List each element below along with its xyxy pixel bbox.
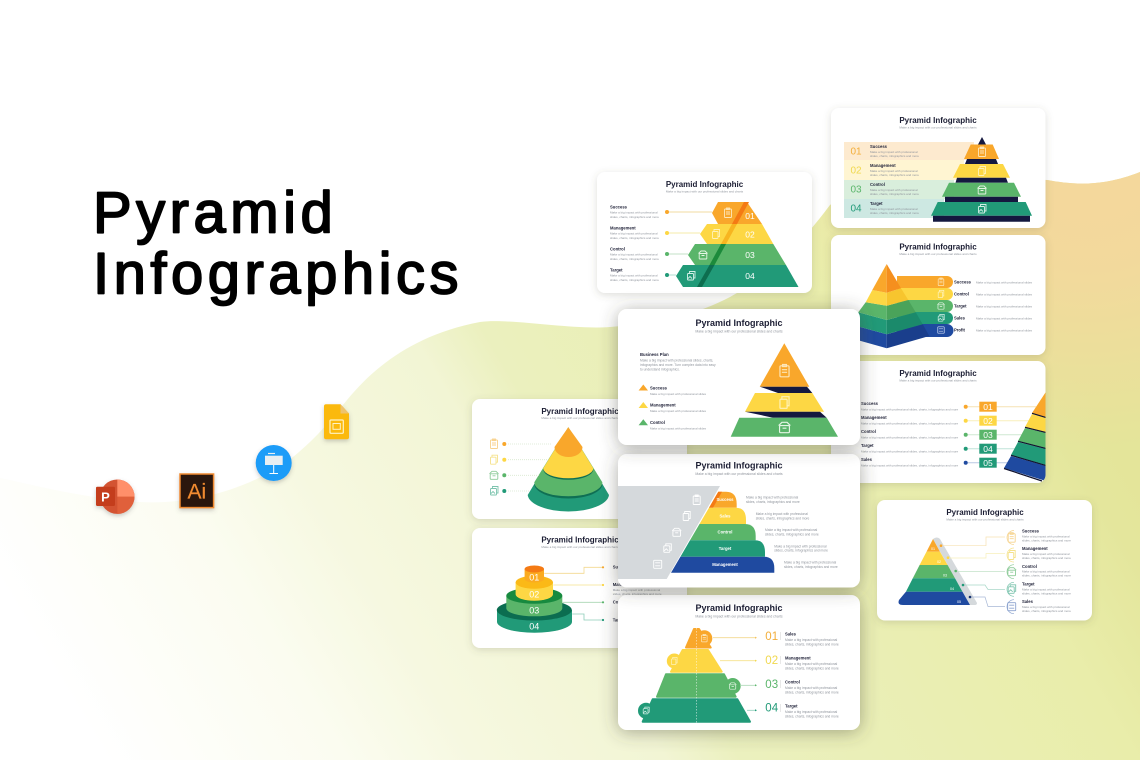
intro text [640,352,716,372]
colour bands: Make a big impact with professional [870,169,918,173]
labels: slides, charts, infographics and more [1022,574,1071,578]
panel: hexagon tab pyramid: Make a big impact with our professional slides and charts [666,190,744,194]
labels: Make a big impact with professional [785,662,837,666]
step chart: Management [712,562,738,567]
dots and connectors [490,439,552,495]
arrows [713,637,757,711]
stacked cylinder chart: 04 [529,622,539,632]
connectors and number boxes: 03 [983,430,993,440]
labels: Target [861,443,874,448]
connectors and number boxes: 05 [983,458,993,468]
numbers: 02 [765,655,778,667]
panel: stepped pyramid: Make a big impact with our professional slides and charts [695,472,783,476]
labels: slides, charts, infographics and more [610,257,659,261]
colour bands: 02 [850,166,862,176]
pyramid chart: 05 [957,600,961,604]
pyramid chart [731,343,838,437]
labels: Management [610,226,636,230]
pyramid chart: 01 [745,211,755,221]
descriptions: Make a big impact with professional [756,512,808,516]
panel: stacked cylinders pyramid [472,528,687,648]
pyramid chart: 03 [745,250,755,260]
icon: PowerPoint: P [101,490,110,504]
pyramid chart [931,137,1032,222]
labels: Make a big impact with professional slides [976,304,1033,308]
labels: Make a big impact with professional [1022,588,1070,592]
labels: Success [861,401,879,406]
connectors [544,566,604,621]
labels: Sales [785,631,797,636]
labels: Target [613,617,626,622]
labels: Profit [954,328,966,332]
labels: slides, charts, infographics and more [785,690,839,694]
labels: Make a big impact with professional [785,710,837,714]
pyramid chart: 03 [943,574,947,578]
descriptions: Make a big impact with professional [774,544,827,548]
colour bands: slides, charts, infographics and more [870,173,919,177]
card title: Pyramid Infographic [899,369,977,378]
colour bands: Make a big impact with professional [870,150,918,154]
labels: Control [610,246,625,252]
grey parallelogram [618,486,720,579]
card title: Pyramid Infographic [666,180,744,189]
labels: Make a big impact with professional slides [976,280,1033,284]
labels: Make a big impact with professional [1022,570,1070,574]
step chart: Sales [720,513,731,518]
descriptions: Make a big impact with professional [765,528,817,532]
labels: Success [613,564,630,569]
grey icons [654,495,700,568]
labels: Make a big impact with professional slides, charts, infographics and more [861,408,959,412]
card title: Pyramid Infographic [899,242,977,252]
panel: hexagon tab pyramid [597,172,812,293]
panel: 3D pyramid with tabs [831,235,1046,355]
legend: Success [650,385,668,390]
descriptions: Make a big impact with professional [784,560,836,564]
pyramid chart: 01 [931,547,935,551]
labels: slides, charts, infographics and more [1022,538,1071,542]
pyramid chart [638,628,750,723]
labels: Make a big impact with professional slides [976,292,1033,296]
connectors and number boxes [964,402,1036,468]
main heading [93,180,463,306]
labels [613,564,662,622]
labels: Target [610,268,623,272]
labels: Sales [954,316,966,320]
step chart: Success [716,497,734,502]
panel: funnel callout pyramid: Make a big impact with our professional slides and charts [946,518,1024,522]
panel: rounded pyramid with numbers: Make a big impact with our professional slides and charts [695,614,783,618]
step chart: Target [719,546,732,551]
colour bands: slides, charts, infographics and more [870,154,919,158]
connectors and circular icons [940,530,1016,614]
labels: Management [861,415,887,420]
colour bands: Target [870,201,883,206]
panel: cone pyramid: Make a big impact with our professional slides and charts [541,416,619,420]
labels: Target [785,703,798,708]
connectors and number boxes: 04 [983,444,993,454]
pyramid chart: 04 [745,271,755,281]
colour bands: slides, charts, infographics and more [870,211,919,215]
labels [954,280,1033,332]
labels: Make a big impact with professional [610,210,658,214]
legend [639,384,707,430]
step chart [671,492,774,573]
labels: Make a big impact with professional [610,232,658,236]
labels: Make a big impact with professional slides, charts, infographics and more [861,450,959,454]
legend: Control [650,420,665,425]
labels: Make a big impact with professional slides, charts, infographics and more [861,436,959,440]
pyramid chart: 02 [937,560,941,564]
colour bands: Success [870,144,888,149]
panel: 3D pyramid with tabs: Make a big impact with our professional slides and charts [899,252,977,256]
labels: Make a big impact with professional [785,638,837,642]
labels: Make a big impact with professional slides [976,316,1033,320]
labels: slides, charts, infographics and more [785,714,839,718]
connectors and number boxes: 02 [983,416,993,426]
descriptions: slides, charts, infographics and more [774,549,828,553]
labels: Make a big impact with professional [785,686,837,690]
labels: Make a big impact with professional [610,252,658,256]
labels: Target [954,304,967,308]
card title: Pyramid Infographic [946,508,1024,517]
colour bands: Management [870,163,896,168]
colour bands: 04 [850,204,862,214]
intro text: to understand infographics. [640,368,680,372]
labels: slides, charts, infographics and more [785,642,839,646]
card title: Pyramid Infographic [899,116,977,125]
icon: Google Slides [324,404,349,439]
pyramid chart [898,538,977,605]
descriptions: slides, charts, infographics and more [746,500,800,504]
labels: Make a big impact with professional [613,588,661,592]
labels: Make a big impact with professional slides [976,328,1033,332]
panel: business plan pyramid: Make a big impact with our professional slides and charts [695,330,783,334]
labels: slides, charts, infographics and more [785,666,839,670]
legend: Make a big impact with professional slides [650,392,707,396]
panel: stacked cylinders pyramid: Make a big impact with our professional slides and charts [541,545,619,549]
labels: Control [954,292,969,296]
labels [1022,528,1071,613]
labels: Control [1022,564,1037,569]
labels [610,204,659,282]
icon: Keynote [256,445,292,481]
labels: slides, charts, infographics and more [1022,556,1071,560]
colour bands [844,142,974,218]
card title: Pyramid Infographic [695,318,783,328]
colour bands: slides, charts, infographics and more [870,192,919,196]
descriptions: Make a big impact with professional [746,496,798,500]
panel: funnel callout pyramid [877,500,1092,620]
panel: cone pyramid [472,399,687,519]
labels: Make a big impact with professional [1022,552,1070,556]
labels: Target [1022,582,1035,586]
connectors and number boxes: 01 [983,402,993,412]
numbers [765,631,781,715]
colour bands: 03 [850,184,862,196]
labels: slides, charts, infographics and more [1022,609,1071,613]
descriptions [746,496,838,569]
panel: stepped pyramid [618,454,860,588]
labels: Make a big impact with professional [1022,605,1070,609]
intro text: infographics and more. Turn complex data into easy [640,363,716,367]
step chart: Control [718,530,732,535]
colour bands: Control [870,182,885,187]
panel: business plan pyramid [618,309,860,445]
legend: Management [650,403,676,408]
labels: slides, charts, infographics and more [613,592,662,596]
labels: Success [610,204,628,210]
numbers: 04 [765,703,779,715]
labels: slides, charts, infographics and more [610,215,659,219]
labels: Make a big impact with professional slides, charts, infographics and more [861,422,959,426]
labels: Sales [861,457,873,462]
3D pyramid [858,264,929,348]
labels: Make a big impact with professional [1022,534,1070,538]
cropped pyramid [1004,392,1046,481]
pyramid chart: 04 [950,587,954,591]
card title: Pyramid Infographic [541,407,619,416]
labels: Management [785,655,811,660]
icon: PowerPoint [96,480,134,514]
main heading: Pyramid [93,180,337,246]
descriptions: slides, charts, infographics and more [756,516,810,520]
labels [785,631,839,718]
pyramid chart: 02 [745,230,755,240]
cone chart [528,427,609,511]
legend: Make a big impact with professional slides [650,409,707,413]
connector lines and dots [665,210,712,277]
card title: Pyramid Infographic [695,603,783,613]
labels: Control [861,429,876,434]
colour bands: Make a big impact with professional [870,207,918,211]
labels: Success [1022,528,1040,534]
labels: Make a big impact with professional slides, charts, infographics and more [861,464,959,468]
intro text: Make a big impact with professional slides, charts, [640,358,713,362]
numbers: 01 [765,631,778,643]
intro text: Business Plan [640,352,669,357]
panel: layered pyramid with bands: Make a big impact with our professional slides and charts [899,126,977,130]
stacked cylinder chart: 02 [529,590,539,600]
panel: rounded pyramid with numbers [618,595,860,730]
labels: Management [1022,546,1048,551]
stacked cylinder chart [497,566,572,633]
labels: slides, charts, infographics and more [610,236,659,240]
stacked cylinder chart: 01 [529,572,539,582]
labels: Success [954,280,972,284]
card title: Pyramid Infographic [541,536,619,544]
card title: Pyramid Infographic [695,460,783,470]
labels: slides, charts, infographics and more [1022,592,1071,596]
descriptions: slides, charts, infographics and more [784,565,838,569]
coloured tabs [897,276,954,337]
stacked cylinder chart: 03 [529,606,539,616]
icon: Adobe Illustrator: Ai [187,480,206,504]
panel: cropped pyramid with number boxes [831,361,1046,483]
labels [861,401,959,468]
icon: Adobe Illustrator [180,474,214,508]
labels: Management [613,582,639,587]
labels: Control [785,679,800,684]
colour bands: Make a big impact with professional [870,188,918,192]
labels: slides, charts, infographics and more [610,278,659,282]
descriptions: slides, charts, infographics and more [765,532,819,536]
colour bands: 01 [850,146,862,158]
labels: Make a big impact with professional [610,274,658,278]
legend: Make a big impact with professional slides [650,426,707,430]
labels: Control [613,600,628,605]
panel: layered pyramid with bands [831,108,1046,228]
panel: cropped pyramid with number boxes: Make a big impact with our professional slides and charts [899,378,977,382]
labels: Sales [1022,599,1034,604]
main heading: Infographics [93,242,463,306]
numbers: 03 [765,679,778,691]
pyramid chart [676,202,798,287]
